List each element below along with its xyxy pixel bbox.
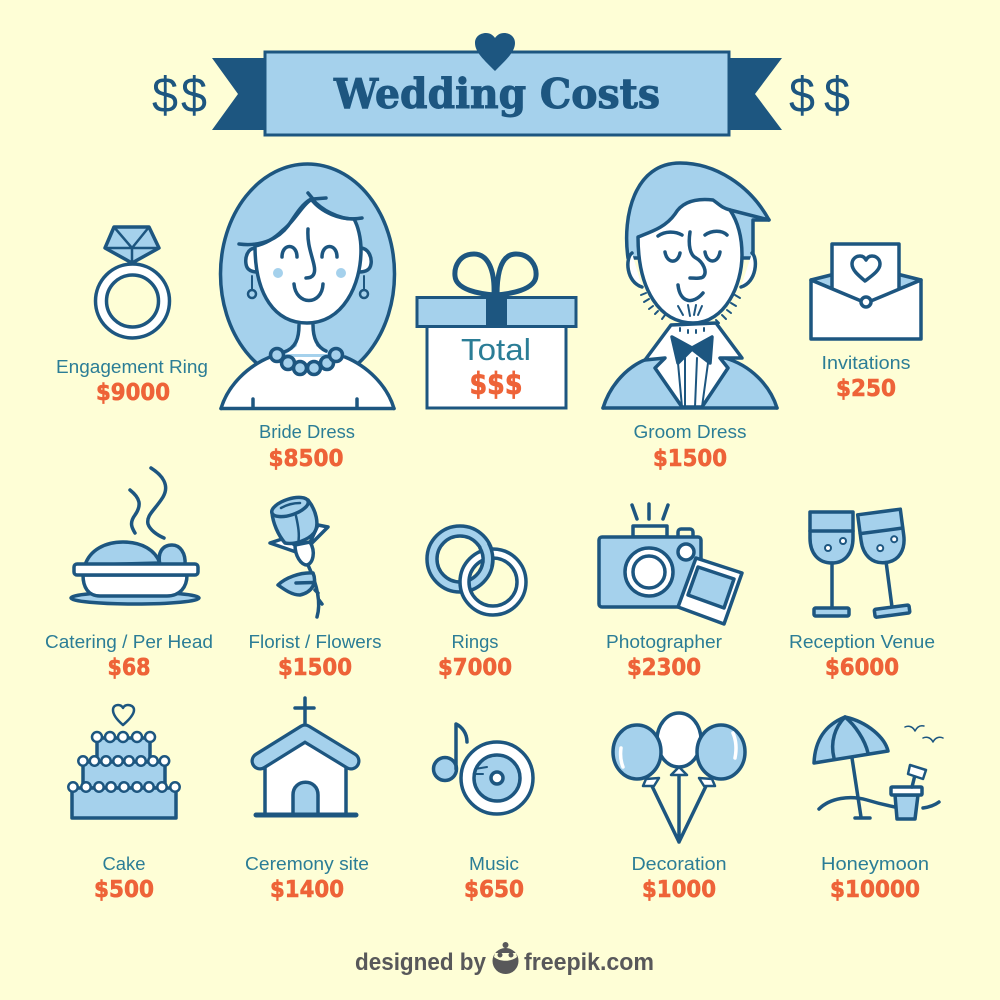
pearls middle: [78, 756, 169, 766]
label: invitations: [822, 353, 910, 402]
label: honeymoon: Honeymoon: [821, 854, 929, 874]
label: cake: Cake: [102, 854, 146, 874]
icon: wine glasses: [810, 509, 914, 618]
label: groom dress: Groom Dress: [634, 422, 746, 442]
icon: balloons: [613, 713, 745, 842]
title: Wedding Costs: [333, 70, 660, 118]
label: music: $650: [464, 877, 524, 903]
icon: gift box total: [417, 254, 576, 408]
footer credit: designed by: [355, 949, 487, 976]
dollar signs left: [152, 67, 207, 123]
blue ring: [427, 526, 493, 592]
bride face: [255, 199, 361, 323]
label: music: Music: [469, 854, 519, 874]
card: [832, 244, 899, 304]
plate: [71, 592, 199, 604]
label: engagement ring: Engagement Ring: [56, 357, 208, 377]
label: catering: Catering / Per Head: [45, 632, 213, 652]
groom hair tip: [730, 210, 769, 220]
leaf: [278, 573, 314, 595]
umbrella canopy: [814, 717, 888, 763]
label: decoration: Decoration: [632, 854, 726, 874]
label: rings: [438, 632, 512, 681]
dollar signs right: [789, 67, 850, 123]
groom stubble: [641, 293, 740, 333]
blush: [273, 268, 283, 278]
dollar signs left: $: [152, 67, 178, 123]
cake heart: [113, 705, 134, 725]
label: photographer: [606, 632, 722, 681]
envelope back: [811, 274, 921, 303]
sepals: [270, 538, 296, 552]
icon: bride: [220, 164, 394, 408]
door: [293, 782, 318, 815]
pearls bottom: [68, 782, 180, 792]
dollar signs left: $: [181, 67, 207, 123]
label: music: [464, 854, 524, 903]
icon: catering dish: [71, 468, 199, 604]
gift ribbon: [486, 297, 507, 327]
balloon left: [613, 725, 661, 779]
label: florist: [248, 632, 382, 681]
gift box: [427, 326, 566, 408]
rim: [74, 564, 198, 575]
envelope body: [811, 280, 921, 339]
icon: gift box total: $$$: [470, 367, 522, 402]
viewfinder: [678, 544, 694, 560]
food: [85, 542, 160, 565]
icon: music: [434, 724, 533, 814]
label: ceremony site: $1400: [270, 877, 344, 903]
label: cake: $500: [94, 877, 154, 903]
balloon right: [697, 725, 745, 779]
label: decoration: [632, 854, 726, 903]
groom goatee: [678, 305, 702, 316]
label: rings: Rings: [452, 632, 498, 652]
balloon middle: [657, 713, 701, 767]
label: invitations: Invitations: [822, 353, 910, 373]
label: reception venue: Reception Venue: [789, 632, 935, 652]
groom ears: [628, 253, 642, 287]
groom brows and eyes: [658, 231, 727, 261]
label: photographer: Photographer: [606, 632, 722, 652]
steam: [130, 468, 166, 538]
label: cake: [94, 854, 154, 903]
label: invitations: $250: [836, 376, 896, 402]
icon: beach umbrella: [814, 717, 943, 819]
note: [434, 758, 456, 780]
camera body: [599, 537, 701, 607]
bucket: [895, 795, 918, 819]
roof: [260, 733, 351, 761]
ground: [256, 812, 356, 818]
label: florist: Florist / Flowers: [248, 632, 382, 652]
bride fringe: [239, 193, 362, 245]
flash and button: [633, 526, 667, 537]
rose head: [272, 500, 317, 543]
label: catering: [45, 632, 213, 681]
gift bow: [455, 254, 536, 295]
label: bride dress: [259, 422, 355, 472]
calyx: [295, 542, 313, 565]
banner tail right: [728, 58, 782, 130]
label: ceremony site: [245, 854, 369, 903]
icon: camera: [599, 504, 742, 624]
bride eyes nose mouth: [282, 229, 337, 300]
label: rings: $7000: [438, 655, 512, 681]
label: honeymoon: [821, 854, 929, 903]
stem: [308, 565, 322, 617]
flash rays: [632, 504, 668, 519]
church walls: [265, 742, 346, 815]
label: engagement ring: $9000: [96, 380, 170, 406]
groom base line: [603, 406, 777, 410]
footer credit: [355, 942, 654, 976]
groom jacket: [603, 358, 777, 408]
bride neck: [286, 320, 328, 354]
banner tail left: [212, 58, 266, 130]
bowl: [83, 575, 187, 596]
bride hair: [220, 164, 394, 384]
groom collar: [645, 323, 742, 407]
total text: Total: [461, 332, 531, 367]
icon: rose: [269, 494, 328, 617]
icon: groom: [603, 163, 777, 408]
cross: [295, 698, 314, 725]
gift lid: [417, 298, 576, 326]
groom nose and mouth: [678, 232, 705, 301]
polaroid: [678, 558, 742, 624]
pearl necklace: [270, 348, 342, 374]
label: groom dress: $1500: [653, 446, 727, 472]
birds: [905, 726, 943, 742]
banner panel: [265, 52, 729, 135]
label: groom dress: [634, 422, 746, 472]
groom shirt lines: [678, 358, 708, 407]
label: catering: $68: [108, 655, 150, 681]
dollar signs right: $: [824, 67, 850, 123]
footer credit: freepik.com: [524, 949, 654, 976]
cake tiers: [97, 738, 150, 762]
title banner: [212, 33, 782, 135]
dollar signs right: $: [789, 67, 815, 123]
ring overlap: [480, 544, 493, 566]
icon: cake: [68, 705, 180, 818]
umbrella pole: [852, 758, 870, 818]
glass left: [810, 512, 853, 616]
label: decoration: $1000: [642, 877, 716, 903]
groom face: [638, 200, 742, 323]
strings: [651, 775, 707, 842]
icon: invitation envelope: [811, 244, 921, 339]
heart on card: [852, 256, 880, 281]
pearls top: [92, 732, 155, 742]
icon: rings: [427, 526, 526, 615]
lens: [625, 548, 673, 596]
label: florist: $1500: [278, 655, 352, 681]
bride ears and earrings: [246, 248, 258, 272]
seal: [861, 297, 871, 307]
label: engagement ring: [56, 357, 208, 406]
glass right: [858, 509, 914, 618]
bride body: [221, 357, 394, 408]
groom bow tie: [672, 337, 712, 363]
icon: engagement ring: [96, 227, 170, 338]
icon: church: [256, 698, 356, 815]
label: photographer: $2300: [627, 655, 701, 681]
shovel: [912, 775, 915, 787]
label: ceremony site: Ceremony site: [245, 854, 369, 874]
groom hair: [627, 163, 769, 258]
bride base line: [221, 407, 394, 410]
white ring: [460, 549, 526, 615]
icon: freepik logo: [492, 942, 518, 974]
label: reception venue: $6000: [825, 655, 899, 681]
label: reception venue: [789, 632, 935, 681]
label: bride dress: $8500: [268, 446, 344, 472]
label: bride dress: Bride Dress: [259, 422, 355, 442]
icon: heart: [475, 33, 515, 71]
label: honeymoon: $10000: [830, 877, 920, 903]
sand: [819, 798, 939, 809]
disc: [461, 742, 533, 814]
